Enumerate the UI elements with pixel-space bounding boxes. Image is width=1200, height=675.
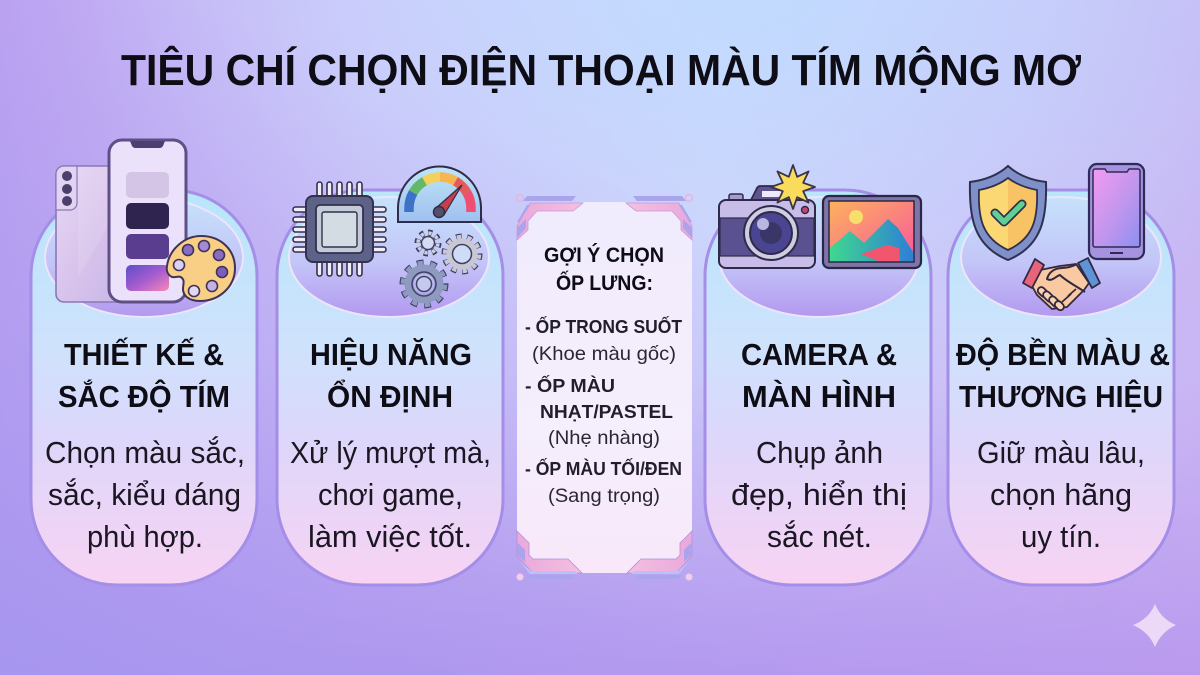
icon: phone and palette bbox=[56, 140, 235, 302]
option: ốp trong suốt bbox=[525, 316, 683, 365]
panel: độ bền màu bbox=[948, 164, 1174, 585]
frame corner bottom left bbox=[516, 531, 582, 580]
option: ốp màu tối: - ỐP MÀU TỐI/ĐEN bbox=[525, 458, 682, 479]
card 5 body: uy tín. bbox=[1021, 520, 1101, 554]
option: ốp màu tối bbox=[525, 458, 682, 507]
card 2 body: chơi game, bbox=[318, 478, 463, 512]
icon: gears bbox=[403, 232, 479, 305]
panel: camera bbox=[705, 165, 931, 585]
card 4 body: Chụp ảnh bbox=[756, 436, 883, 470]
card 4 ellipse bbox=[719, 197, 919, 317]
card 4 heading: MÀN HÌNH bbox=[742, 379, 896, 414]
card 4 shape bbox=[705, 190, 931, 585]
icon: handshake bbox=[1023, 258, 1100, 312]
card 5 heading: THƯƠNG HIỆU bbox=[959, 378, 1163, 414]
card 4 body: đẹp, hiển thị bbox=[731, 478, 907, 512]
card 5 ellipse bbox=[961, 197, 1161, 317]
card 1 body bbox=[45, 435, 245, 554]
card 1 heading: THIẾT KẾ & bbox=[64, 337, 224, 372]
card 2 body: làm việc tốt. bbox=[308, 520, 472, 554]
card 5 body bbox=[977, 436, 1145, 554]
card 1 shape bbox=[31, 190, 257, 585]
icon: gauge bbox=[398, 166, 481, 222]
card 2 heading: ỔN ĐỊNH bbox=[327, 378, 453, 414]
icon: shield bbox=[970, 166, 1046, 260]
icon: chip bbox=[293, 182, 386, 276]
option: ốp màu tối: (Sang trọng) bbox=[548, 485, 660, 507]
card 1 heading bbox=[58, 337, 230, 414]
card 5 body: Giữ màu lâu, bbox=[977, 436, 1145, 470]
option: ốp màu nhạt: - ỐP MÀU bbox=[525, 375, 615, 396]
card 4 body: sắc nét. bbox=[767, 519, 872, 554]
card 5 body: chọn hãng bbox=[990, 478, 1132, 512]
icon: sparkle bbox=[1133, 604, 1176, 647]
option: ốp màu nhạt: (Nhẹ nhàng) bbox=[548, 427, 660, 449]
option: ốp trong suốt: - ỐP TRONG SUỐT bbox=[525, 316, 683, 337]
icon: camera bbox=[719, 186, 815, 268]
card 2 body: Xử lý mượt mà, bbox=[290, 436, 491, 470]
option: ốp màu nhạt: NHẠT/PASTEL bbox=[540, 401, 673, 422]
card 4 body bbox=[731, 436, 907, 554]
frame corner bottom right bbox=[627, 531, 692, 580]
card 2 shape bbox=[277, 190, 503, 585]
card 1 body: sắc, kiểu dáng bbox=[48, 477, 241, 512]
panel: gợi ý chọn ốp lưng bbox=[516, 194, 692, 580]
panel heading bbox=[544, 243, 664, 295]
card 1 ellipse bbox=[45, 197, 243, 317]
card 4 heading bbox=[741, 337, 897, 414]
card 5 heading bbox=[956, 336, 1170, 414]
card 5 shape bbox=[948, 190, 1174, 585]
card 4 heading: CAMERA & bbox=[741, 337, 897, 372]
icon: flash star bbox=[771, 165, 815, 209]
card 1 heading: SẮC ĐỘ TÍM bbox=[58, 378, 230, 414]
title: TIÊU CHÍ CHỌN ĐIỆN THOẠI MÀU TÍM MỘNG MƠ bbox=[121, 44, 1081, 95]
card 1 body: phù hợp. bbox=[87, 520, 203, 554]
frame corner top right bbox=[626, 194, 692, 240]
card 1 body: Chọn màu sắc, bbox=[45, 435, 245, 470]
panel: hiệu năng bbox=[277, 166, 503, 585]
icon: phone bbox=[1089, 164, 1144, 259]
frame corner top left bbox=[516, 194, 583, 240]
card 5 heading: ĐỘ BỀN MÀU & bbox=[956, 336, 1170, 372]
panel heading: GỢI Ý CHỌN bbox=[544, 243, 664, 267]
card 2 body bbox=[290, 436, 491, 554]
card 2 heading: HIỆU NĂNG bbox=[310, 336, 472, 372]
option: ốp trong suốt: (Khoe màu gốc) bbox=[532, 343, 676, 365]
card 2 heading bbox=[310, 336, 472, 414]
panel frame bbox=[517, 202, 692, 573]
panel heading: ỐP LƯNG: bbox=[556, 271, 653, 295]
card 2 ellipse bbox=[289, 197, 489, 317]
option: ốp màu nhạt bbox=[525, 375, 673, 449]
icon: photo bbox=[823, 196, 921, 268]
panel: thiết kế bbox=[31, 140, 257, 585]
